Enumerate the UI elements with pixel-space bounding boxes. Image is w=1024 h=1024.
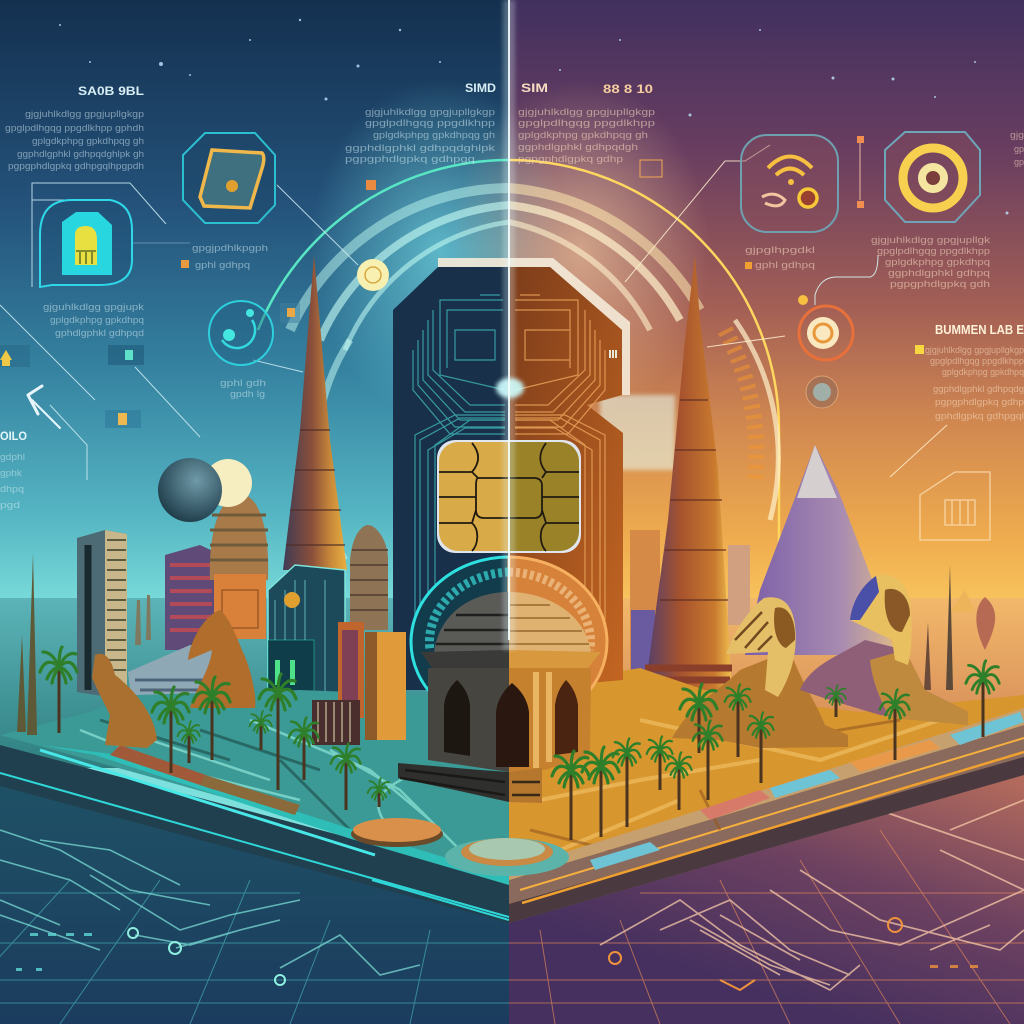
text block: left middle: gjguhlkdlgg gpgjupk <box>43 302 145 312</box>
text block: right lower: gplgdkphpg gpkdhpq <box>942 367 1024 377</box>
text block: right lower: ggphdlgphkl gdhpqdg <box>933 384 1024 394</box>
tablet rim left <box>40 745 509 885</box>
text block: far left: gphk <box>0 468 23 478</box>
text block: far right top <box>1010 130 1024 167</box>
palm trunks <box>59 665 983 840</box>
right sphinx one <box>672 597 848 748</box>
purple building <box>165 545 215 650</box>
text block: center left: ggphdlgphkl gdhpqdghlpk <box>345 143 496 153</box>
text block: wifi label: gphl gdhpq <box>755 260 815 270</box>
central light glow <box>310 80 710 420</box>
text block: right upper: ggphdlgphkl gdhpq <box>888 268 990 278</box>
pyramid right <box>745 445 895 655</box>
text block: small labels <box>192 243 268 399</box>
text block: far right top: gp <box>1014 144 1024 154</box>
icon: target <box>885 132 980 222</box>
sim lip <box>438 258 630 395</box>
horizon: sea and desert <box>0 598 1024 768</box>
ground teal <box>0 690 509 877</box>
stars <box>59 19 1008 214</box>
icon: pointer arrow <box>28 386 60 428</box>
beige tower <box>350 525 388 630</box>
text block: small labels: gphl gdh <box>220 378 266 388</box>
text block: right lower: gphdlgpkq gdhpgql <box>935 411 1024 421</box>
text block: center right: ggphdlgphkl gdhpqdgh <box>518 142 638 152</box>
text block: right upper: gjgjuhlkdlgg gpgjupllgk <box>871 235 991 245</box>
text block: right upper: pgpgphdlgpkq gdh <box>890 279 990 289</box>
distant spikes <box>135 595 151 645</box>
text block: right lower: gpglpdlhgqg ppgdlkhpp <box>930 356 1024 366</box>
text block: center right: pgpgphdlgpkq gdhp <box>518 154 623 164</box>
sim circuit right <box>515 295 605 620</box>
text block: right lower: pgpgphdlgpkq gdhp <box>935 397 1024 407</box>
palm fronds <box>40 647 999 800</box>
title right: 88 8 10 <box>603 82 653 96</box>
teal glass building <box>268 565 345 705</box>
SIM card <box>393 258 630 690</box>
text block: left top: gplgdkphpg gpkdhpqg gh <box>32 136 144 146</box>
glass panel behind sim <box>600 395 675 470</box>
text block: left top <box>5 109 144 171</box>
icon: orbit circle <box>209 301 273 365</box>
text block: left middle: gphdlgphkl gdhpqd <box>55 328 144 338</box>
text block: center left: pgpgphdlgpkq gdhpgq <box>345 154 475 164</box>
horse statue <box>188 610 255 708</box>
text block: center right: gplgdkphpg gpkdhpqg gh <box>518 130 648 140</box>
text block: far right top: gp <box>1014 157 1024 167</box>
center light beam <box>503 0 515 650</box>
ground sand <box>509 668 1024 880</box>
text block: right lower: gjgjuhlkdlgg gpgjupllgkgp <box>925 345 1024 355</box>
floor dashes <box>16 933 978 971</box>
text block: center left: gplgdkphpg gpkdhpqg gh <box>373 130 495 140</box>
text block: left top: ggphdlgphkl gdhpqdghlpk gh <box>17 149 144 159</box>
medallion <box>411 557 607 727</box>
text block: center right: gpglpdlhgqg ppgdlkhpp <box>518 118 655 128</box>
text block: left top: gjgjuhlkdlgg gpgjupllgkgp <box>25 109 144 119</box>
text block: right upper: gpglpdlhgqg ppgdlkhpp <box>877 246 990 256</box>
text block: center right: gjgjuhlkdlgg gpgjupllgkgp <box>518 107 655 117</box>
ground texture <box>80 720 940 860</box>
text block: left top: pgpgphdlgpkq gdhpgqlhpgpdh <box>8 161 144 171</box>
text block: far left: gdphl <box>0 452 25 462</box>
small chips <box>0 160 924 428</box>
icon: gold card <box>183 133 275 223</box>
icon: small badge <box>806 376 838 408</box>
text block: center left: gpglpdlhgqg ppgdlkhpp <box>365 118 495 128</box>
text block: center left: gjgjuhlkdlgg gpgjupllgkgp <box>365 107 495 117</box>
tablet base side <box>0 725 1024 923</box>
text block: far left <box>0 452 25 510</box>
right spire <box>645 255 732 690</box>
text block: small labels: gpdh lg <box>230 389 265 399</box>
left obelisks <box>17 553 37 735</box>
right background building <box>630 530 750 670</box>
sim right half <box>509 267 623 690</box>
pyramid cap <box>797 445 837 498</box>
floor left <box>0 770 509 1024</box>
background: orange half <box>509 0 1024 1024</box>
floor right <box>509 760 1024 1024</box>
orange blocks <box>312 622 406 745</box>
text block: left middle <box>43 302 145 338</box>
holographic rings <box>258 160 779 620</box>
connector lines <box>0 140 947 480</box>
text block: right upper <box>871 235 991 289</box>
stepped plinth <box>128 645 225 705</box>
title center left: SIMD <box>465 81 496 95</box>
sim center glow <box>496 378 524 398</box>
text block: wifi label: gjpglhpgdkl <box>745 245 815 255</box>
city skyline left <box>77 255 388 710</box>
icon: spiral orange <box>798 295 853 360</box>
sim left half <box>393 267 509 690</box>
tower grey <box>77 530 127 700</box>
left spire <box>283 255 347 570</box>
title left: SA0B 9BL <box>78 84 144 98</box>
icon: bracket <box>857 136 864 208</box>
tablet rim right <box>509 708 1024 880</box>
sim vent <box>610 350 616 358</box>
button coin left <box>351 818 443 847</box>
dark building <box>268 640 314 710</box>
text block: right lower <box>925 345 1024 421</box>
icon: building outline <box>920 472 990 540</box>
left statues <box>92 610 255 748</box>
rim labels <box>110 712 1024 870</box>
lion statue <box>92 654 157 748</box>
text block: left top: gpglpdlhgqg ppgdlkhpp gphdh <box>5 123 144 133</box>
text block: far right top: gjg <box>1010 130 1024 140</box>
floor grid and circuit traces <box>0 800 1024 1024</box>
dome building <box>398 592 601 803</box>
text block: far left: dhpq <box>0 484 24 494</box>
button coin right <box>445 838 569 876</box>
icon: SIM card cyan <box>40 200 132 287</box>
text block: left middle: gplgdkphpg gpkdhpq <box>50 315 144 325</box>
background: blue half <box>0 0 509 1024</box>
text block: right upper: gplgdkphpg gpkdhpq <box>885 257 990 267</box>
sim chip <box>437 440 581 553</box>
tablet edge highlights <box>0 738 1024 920</box>
text block: wifi label <box>745 245 815 270</box>
text block: center right <box>518 107 655 164</box>
domed tower <box>158 458 268 639</box>
text block: small labels: gphl gdhpq <box>195 260 250 270</box>
text block: center left <box>345 107 496 164</box>
sim circuit left <box>413 295 505 620</box>
distant right pyramids and obelisks <box>924 565 995 690</box>
right sphinx two <box>800 575 968 725</box>
icon: wifi <box>741 135 838 232</box>
icon: coin <box>357 259 389 291</box>
text block: small labels: gpgjpdhlkpgph <box>192 243 268 253</box>
label left: OILO <box>0 429 27 443</box>
title center right: SIM <box>521 81 548 95</box>
text block: far left: pgd <box>0 500 20 510</box>
